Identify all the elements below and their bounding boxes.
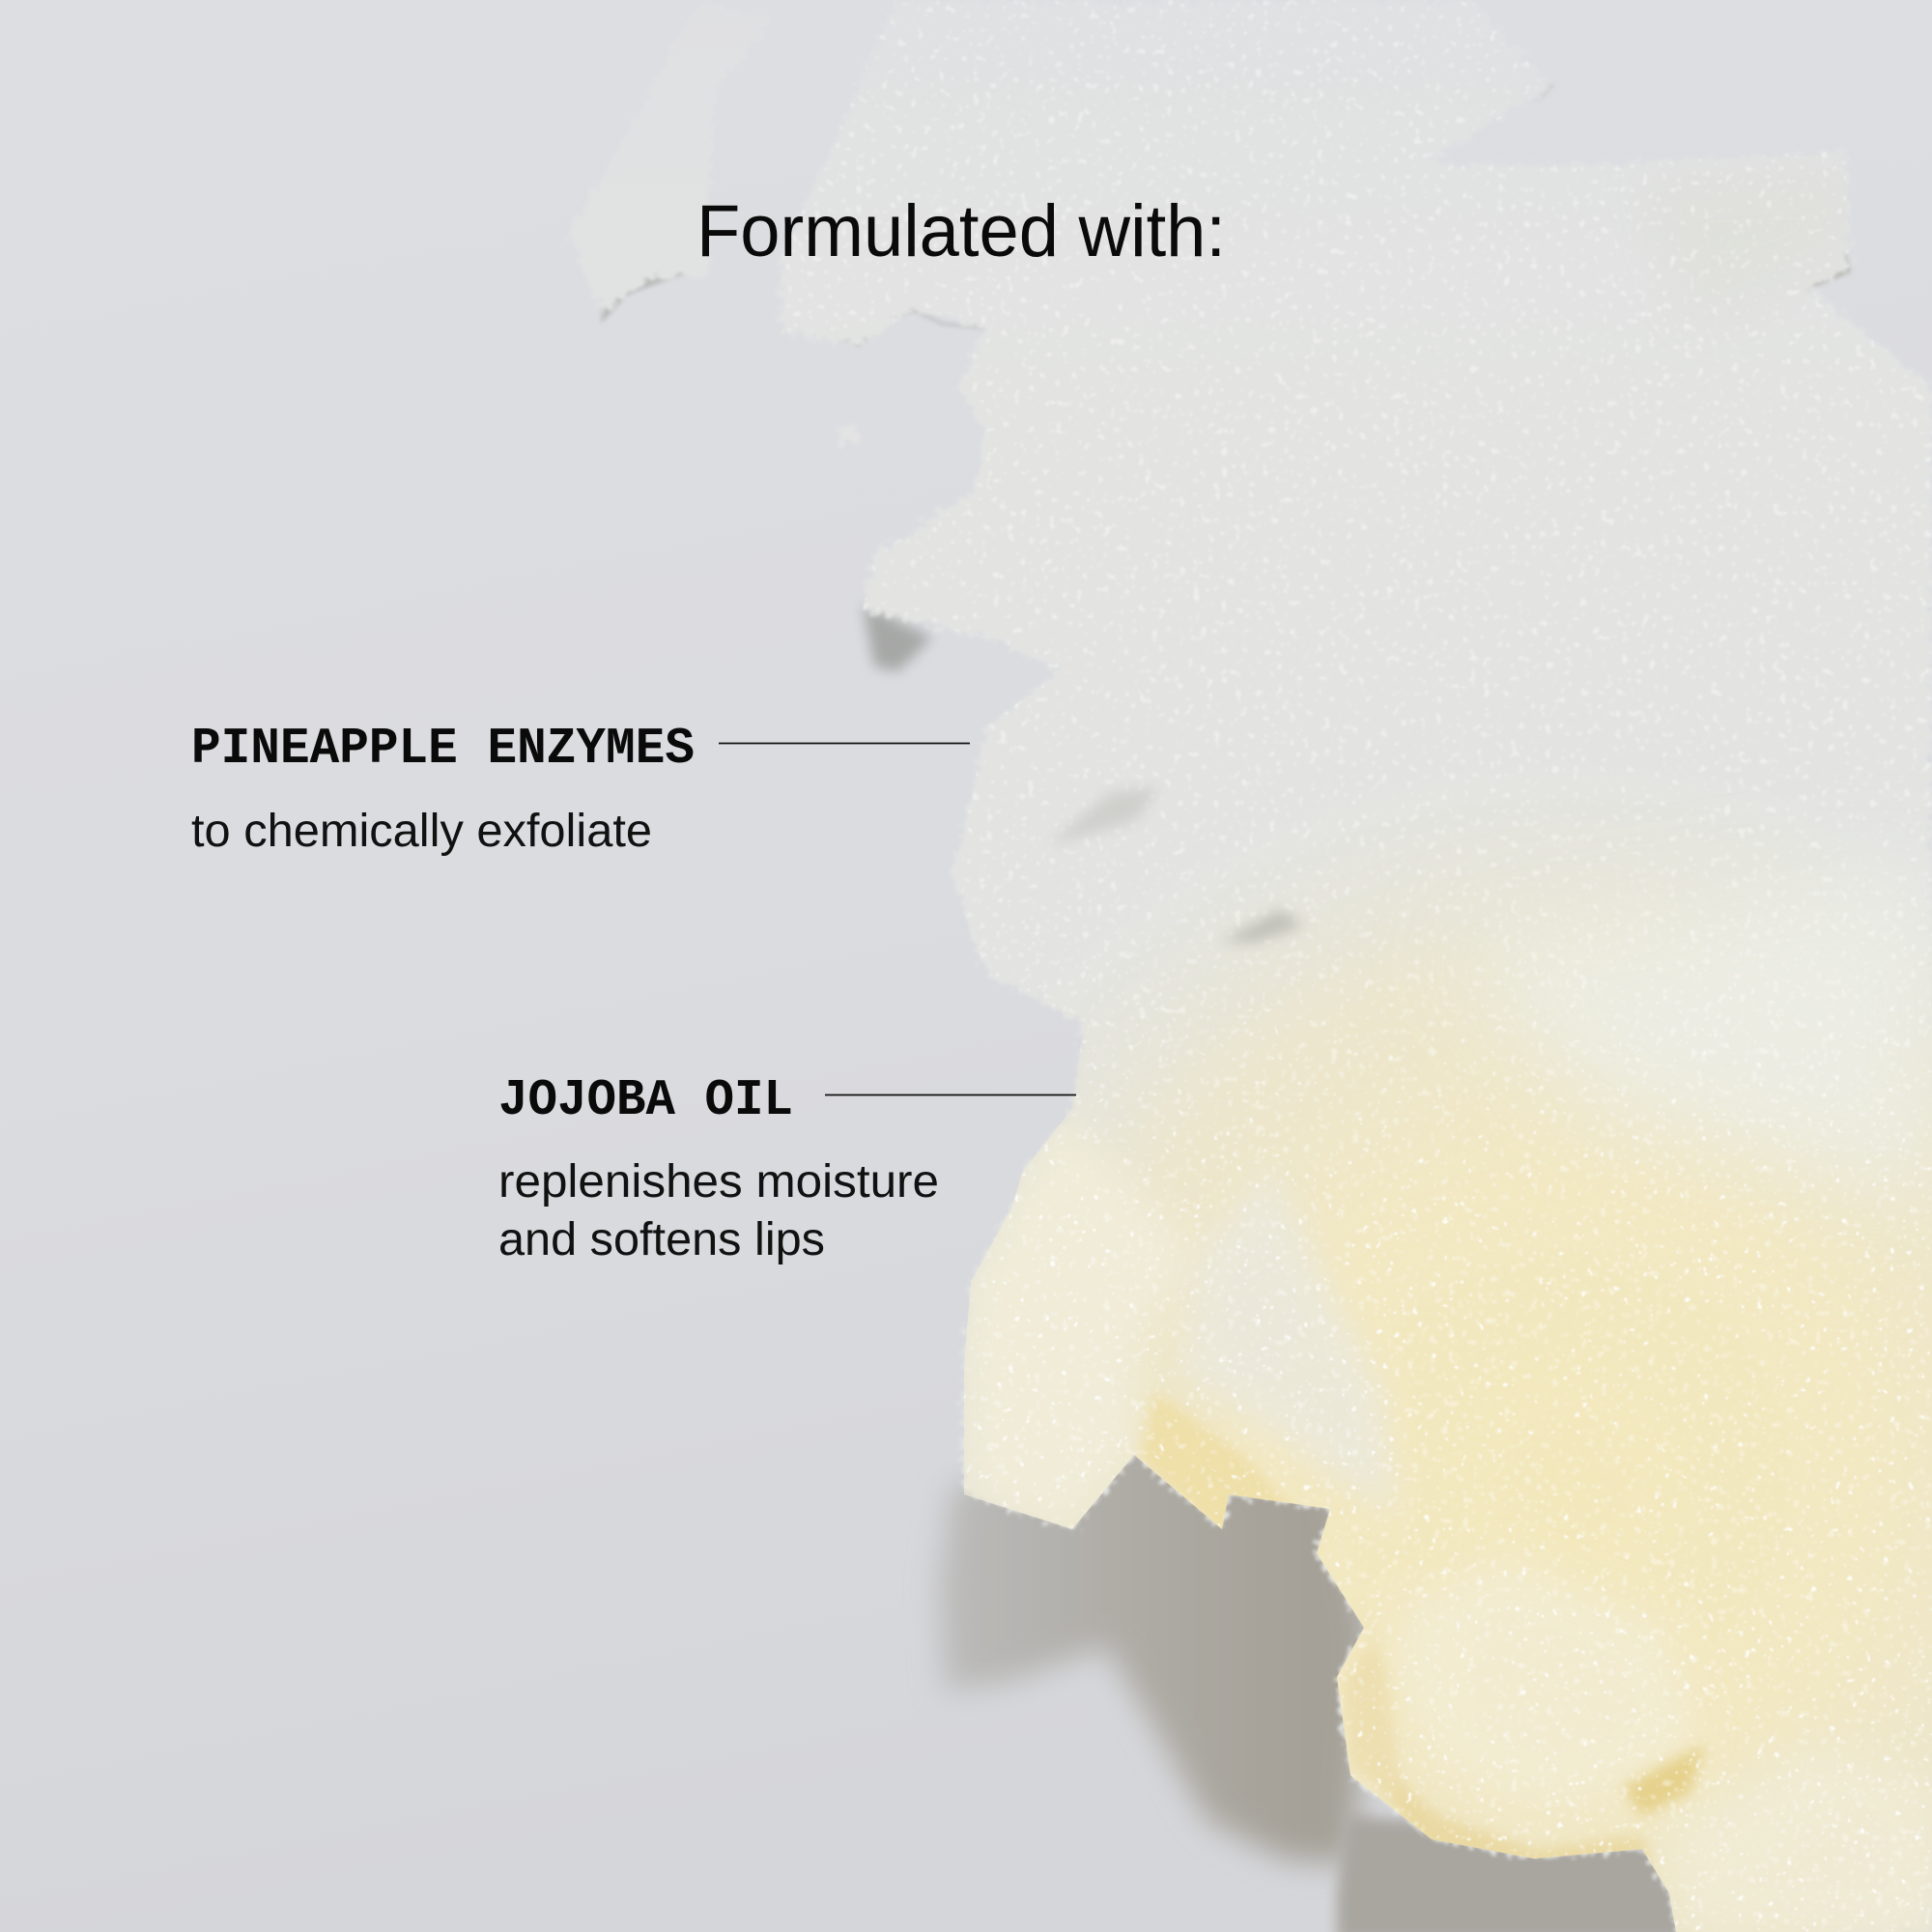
ingredient label: jojoba oil: JOJOBA OIL	[498, 1071, 793, 1129]
title: Formulated with:	[696, 190, 1226, 272]
leader line: jojoba oil	[825, 1094, 1076, 1095]
background photo: scrub smear on grey surface	[599, 0, 1932, 1932]
upper scrub strand	[568, 0, 861, 445]
main smear body	[781, 0, 1932, 1932]
description: jojoba oil: and softens lips	[498, 1214, 825, 1265]
description: jojoba oil	[498, 1156, 939, 1265]
description: pineapple enzymes: to chemically exfoliate	[191, 806, 652, 857]
yellow balm region and crystal texture	[786, 0, 1932, 1932]
internal crevices in the smear	[1048, 787, 1304, 942]
leader line: pineapple enzymes	[719, 742, 970, 744]
description: jojoba oil: replenishes moisture	[498, 1156, 939, 1208]
fade of the thin upper smear into the surface	[0, 0, 1932, 406]
cast shadows under smear	[939, 1430, 1700, 1932]
callout: jojoba oil	[498, 1071, 1076, 1265]
small shadow flecks and crumb edges	[570, 77, 1851, 671]
ingredient label: pineapple enzymes: PINEAPPLE ENZYMES	[191, 720, 695, 778]
callout: pineapple enzymes	[191, 720, 970, 857]
